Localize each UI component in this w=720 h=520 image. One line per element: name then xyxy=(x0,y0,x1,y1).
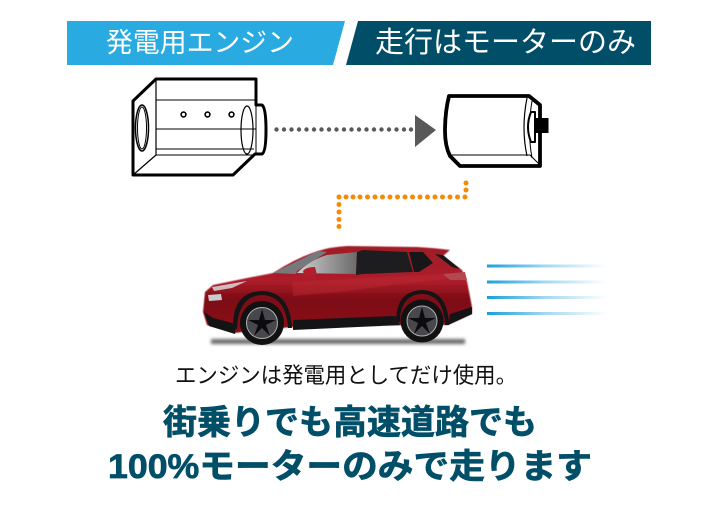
car windows xyxy=(297,252,357,274)
banner: motor only xyxy=(346,21,651,65)
headline xyxy=(108,404,592,486)
car mirror xyxy=(303,267,317,278)
headline: 100%モーターのみで走ります xyxy=(108,448,592,486)
connector: power line from motor to car xyxy=(336,180,468,229)
banner: generator engine: 発電用エンジン xyxy=(106,28,294,58)
car: red SUV xyxy=(203,246,472,345)
banner: motor only: 走行はモーターのみ xyxy=(375,26,636,59)
icon: motor xyxy=(445,96,548,166)
icon: engine xyxy=(133,79,266,175)
headline: 街乗りでも高速道路でも xyxy=(163,404,537,442)
speed lines xyxy=(487,264,607,315)
car rear wheel xyxy=(400,300,444,342)
car front wheel xyxy=(240,301,284,345)
car body xyxy=(203,246,472,333)
banner: generator engine xyxy=(67,21,345,65)
arrow: engine to motor xyxy=(274,115,436,147)
caption: エンジンは発電用としてだけ使用。 xyxy=(175,363,517,388)
car highlights xyxy=(292,274,455,296)
car lights xyxy=(212,281,247,291)
car lower cladding xyxy=(204,307,472,334)
car wheel arches xyxy=(233,291,292,329)
car shadow xyxy=(211,339,465,344)
